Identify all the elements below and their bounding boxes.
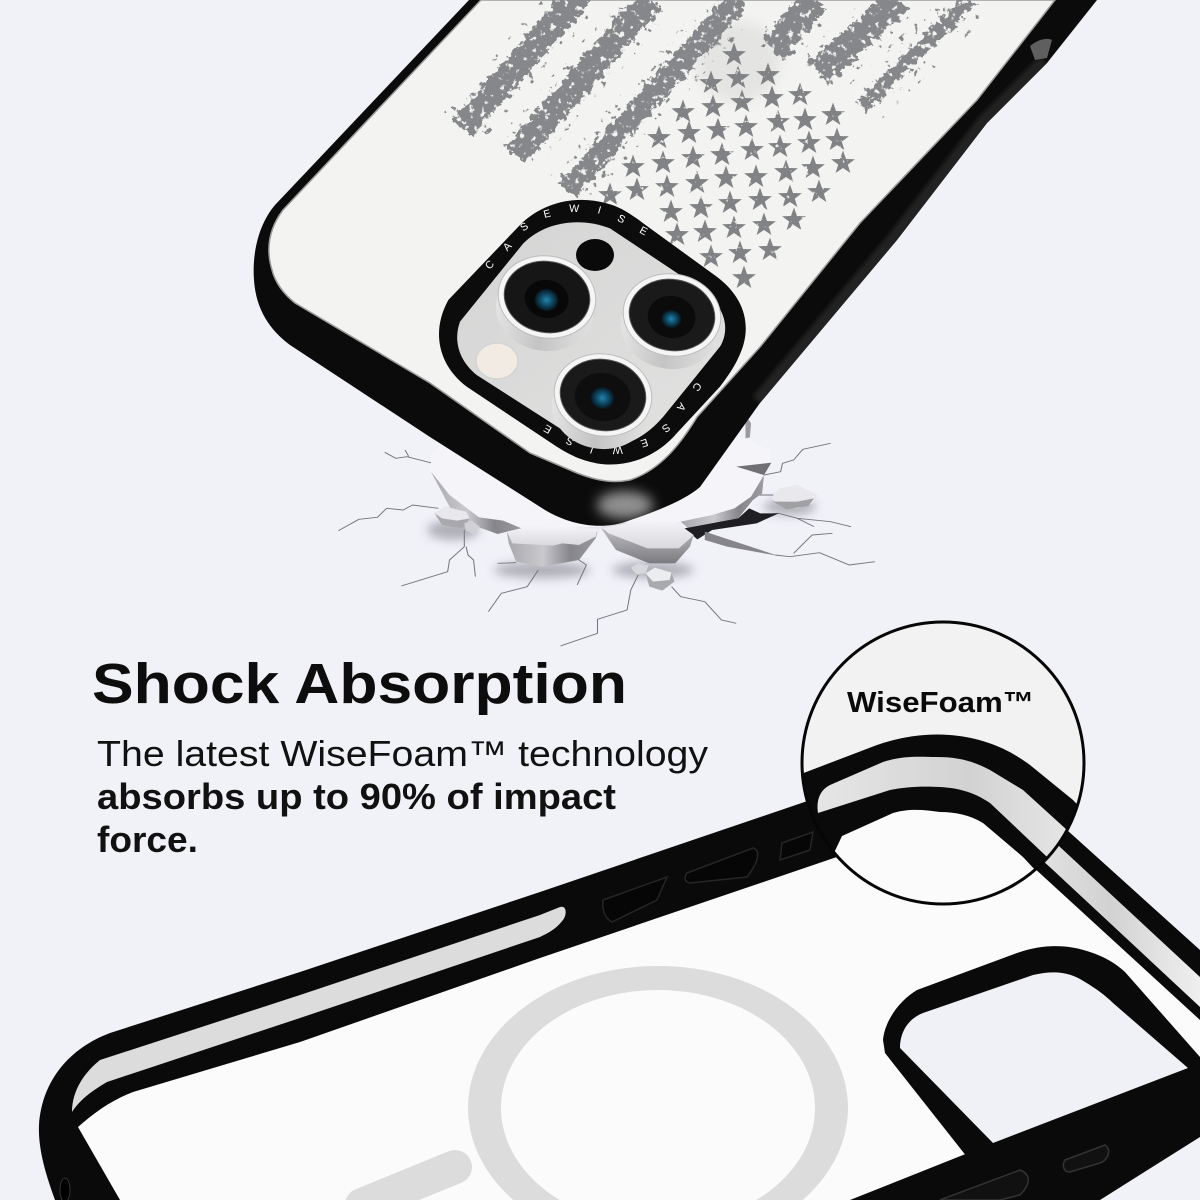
microphone hole: [576, 239, 614, 271]
left edge port: [60, 1178, 70, 1200]
mid block right top: [603, 520, 694, 548]
camera cutout surround: [883, 946, 1200, 1157]
case black bumper: [254, 0, 1097, 526]
right slab side: [681, 475, 764, 530]
ring brand text top: CASEWISE: [486, 204, 648, 268]
foam strip right: [1020, 815, 1200, 1007]
mid block left top: [507, 526, 598, 546]
right wedge top: [746, 415, 751, 438]
heading: Shock Absorption: [92, 652, 627, 716]
enlarged frame: [804, 734, 1076, 869]
bump ring: [439, 200, 746, 464]
clear back panel: [78, 811, 1200, 1200]
right slab: [601, 433, 771, 523]
side buttons: [603, 832, 813, 922]
enlarged case corner: [804, 734, 1076, 902]
dark wedge: [736, 463, 771, 475]
camera cutout: [900, 972, 1188, 1143]
camera bump: [439, 200, 746, 464]
left slab side: [431, 472, 522, 534]
enlarged clear panel: [834, 810, 1034, 902]
body text: The latest WiseFoam™ technology: [97, 733, 708, 774]
mid block left side: [507, 532, 598, 567]
foam strip left: [72, 907, 566, 1112]
body text: force.: [97, 819, 198, 860]
magnetic alignment bar: [362, 1167, 455, 1200]
crack hole: [684, 508, 779, 539]
magnifier background: [802, 622, 1084, 904]
lens top left: [489, 248, 602, 359]
flag stripes: [462, 0, 970, 190]
logo smudge: [696, 22, 780, 102]
back glass: [269, 0, 1055, 482]
bottom phone case: [39, 745, 1200, 1200]
crack shadows: [427, 490, 816, 578]
illustration: cracked ground impact: [338, 415, 875, 646]
flash: [476, 343, 518, 379]
bumper corner glare: [597, 63, 1047, 519]
magnifier outline: [802, 622, 1084, 904]
flag artwork: [462, 0, 970, 288]
left slab: [431, 427, 601, 529]
flag stripes speckle: [462, 0, 970, 190]
enlarged foam strip: [818, 756, 1066, 856]
magnetic ring: [468, 966, 848, 1200]
right flap: [705, 532, 779, 556]
side button highlight: [1030, 39, 1052, 60]
camera plate: [457, 222, 725, 447]
lens right: [614, 266, 727, 377]
case frame silhouette: [39, 745, 1200, 1200]
top phone case: [254, 0, 1097, 526]
small rocks: [435, 485, 818, 591]
body text: [97, 733, 708, 860]
magnifier callout: [800, 620, 1086, 906]
bottom edge ports: [940, 1145, 1109, 1200]
body text: absorbs up to 90% of impact: [97, 776, 616, 817]
crack lines: [338, 443, 875, 646]
ring brand text bottom: CASEWISE: [543, 383, 701, 454]
callout label: WiseFoam™: [847, 687, 1034, 719]
flag stars: [598, 42, 855, 288]
mid block right side: [601, 528, 694, 563]
lens bottom: [545, 346, 658, 457]
